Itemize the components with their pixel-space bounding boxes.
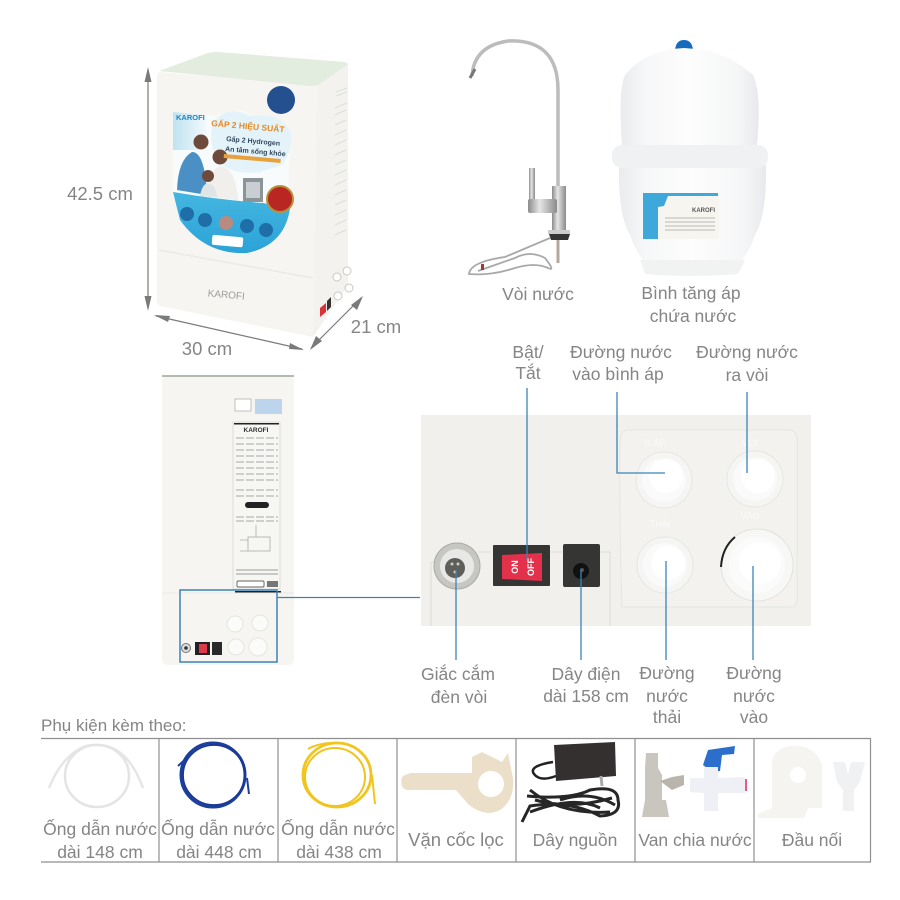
item: blue tube: Ống dẫn nước [161,818,275,839]
faucet body [552,186,566,230]
zoom connector [277,596,420,598]
table: accessories [41,738,870,862]
port: to faucet [727,451,783,507]
item: yellow tube [281,743,395,862]
faucet cable [469,238,551,274]
label: pressure tank [641,283,741,326]
socket [434,543,480,589]
item: blue tube [161,743,275,862]
dimension: height [67,67,152,311]
tank label [643,193,719,239]
label: waste line: Đường [639,663,695,683]
item: bracket and connector: Đầu nối [782,830,842,850]
back switch [195,642,210,655]
label: switch [512,342,544,383]
rocker switch: ON [510,560,520,574]
leader lines [456,388,753,660]
back spec sheet [233,422,280,589]
panel: connector close-up [421,415,811,626]
label: socket [421,663,495,707]
item: white tube: Ống dẫn nước [43,818,157,839]
item: white tube: dài 148 cm [57,842,143,862]
dimension: depth [310,296,401,350]
label: inlet line: Đường [726,663,782,683]
item: bracket and connector [758,746,865,850]
product: pressure tank [612,40,768,276]
label: tank line: vào bình áp [572,364,664,384]
label: inlet line: vào [740,707,768,727]
zoom highlight box [180,590,277,662]
label: faucet line: Đường nước [696,342,798,362]
port recess [620,430,797,607]
back ports [227,615,268,656]
label: socket: đèn vòi [431,687,487,707]
label: tank line: Đường nước [570,342,672,362]
tank base [640,260,745,276]
promotional poster: GẤP 2 HIỆU SUẤT [211,117,286,134]
item: yellow tube: Ống dẫn nước [281,818,395,839]
item: power adapter [522,742,619,850]
label: waste line [639,663,695,727]
label: pressure tank: chứa nước [650,306,736,326]
promotional poster: Gấp 2 Hydrogen [226,135,280,148]
table grid [41,738,870,862]
panel background [421,415,811,626]
label: power cord: Dây điện [551,664,621,684]
power jack [563,544,600,587]
unit top panel [159,52,348,86]
promotional poster: An tâm sống khỏe [225,145,286,158]
item: power adapter: Dây nguồn [533,830,617,850]
item: splitter valve: Van chia nước [638,830,752,850]
promotional poster: KAROFI [176,113,205,122]
port labels embossed: THẢI [650,518,670,529]
port labels embossed: VÒI [742,438,758,448]
label: waste line: nước [646,686,688,706]
tank upper shell [621,48,759,145]
rocker switch [493,545,550,586]
label: switch: Tắt [515,362,541,383]
base logo: KAROFI [207,288,245,303]
port labels embossed: B.ÁP [645,438,665,448]
label: faucet line [696,342,798,385]
label: socket: Giắc cắm [421,663,495,684]
item: blue tube: dài 448 cm [176,842,262,862]
dimension: depth: 21 cm [351,316,401,337]
product: main filter unit [157,52,353,337]
rocker switch: OFF [526,558,536,576]
back socket [182,644,190,652]
port labels embossed [645,438,760,529]
item: splitter valve [638,746,752,850]
item: yellow tube: dài 438 cm [296,842,382,862]
tank cap [675,40,693,50]
label: switch: Bật/ [512,342,544,362]
dimension: width: 30 cm [182,338,232,359]
item: filter wrench [401,752,513,850]
unit side face [313,64,348,337]
port: to tank [636,452,692,508]
label: inlet line [726,663,782,727]
side label [335,88,347,235]
heading: accessories: Phụ kiện kèm theo: [41,716,187,735]
port: waste [637,537,693,593]
product: faucet [469,41,570,274]
item: white tube [43,745,157,862]
product: pressure tank: KAROFI [692,208,715,214]
label: power cord [543,664,629,706]
label: faucet: Vòi nước [502,284,574,304]
label: power cord: dài 158 cm [543,686,629,706]
tank lower shell [619,165,766,265]
dimension: height: 42.5 cm [67,183,133,204]
port labels embossed: VÀO [740,511,760,521]
dimension: width [154,315,304,359]
label: inlet line: nước [733,686,775,706]
faucet spout [472,41,558,190]
label: faucet line: ra vòi [726,365,768,385]
back spec sheet: KAROFI [244,427,269,434]
back power jack [212,642,222,655]
item: filter wrench: Vặn cốc lọc [408,829,504,850]
lower base seam [159,250,313,278]
label: tank line [570,342,672,384]
brand badge [267,86,295,114]
promotional poster [173,110,293,253]
tank ring [612,145,768,168]
back top edge [162,375,294,377]
back view of unit [162,375,294,665]
back label small [235,399,251,411]
label: waste line: thải [653,707,681,727]
port: inlet [721,529,793,601]
label: pressure tank: Bình tăng áp [641,283,741,303]
side switch [320,303,326,317]
side ports [333,267,353,300]
back body [162,376,294,665]
unit front face [157,72,317,337]
